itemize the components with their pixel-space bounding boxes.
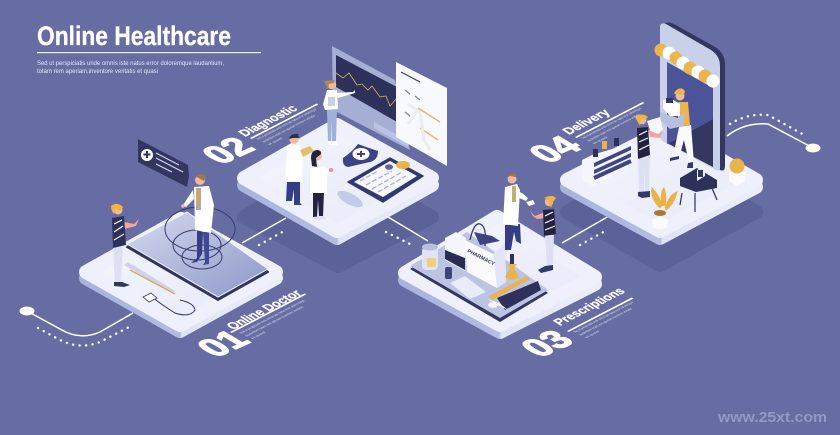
shield icon (343, 144, 378, 167)
body text: Sed ut perspiciatis unde omnis iste natus error doloremque (581, 107, 643, 140)
white chart panel (396, 62, 447, 166)
platform shadows (244, 155, 756, 266)
connector: platform 3 to 4 (562, 216, 609, 245)
platform 2: diagnostic (244, 125, 432, 238)
platform 4: delivery (567, 129, 756, 238)
body text: laudantium totam rem aperiam inventore veritatis (261, 114, 316, 143)
body text: laudantium totam rem aperiam inventore veritatis (578, 307, 633, 336)
body text: et quasi (267, 137, 284, 146)
body text: et quasi (250, 331, 267, 340)
label 04 (519, 102, 652, 168)
gold box (729, 158, 746, 186)
small bottle (445, 267, 452, 279)
number 03: 03 (511, 324, 583, 362)
heading prescriptions: Prescriptions (550, 285, 629, 328)
figure: doctor on platform 1 (181, 174, 214, 265)
shopping bag (465, 224, 506, 288)
figure: doctor on platform 3 (503, 174, 535, 250)
figure: woman doctor at monitor (323, 80, 355, 145)
pharmacy label: PHARMACY (466, 248, 496, 268)
phone on platform (127, 212, 268, 300)
tablet (410, 232, 548, 322)
blister pack (450, 276, 486, 299)
number 02: 02 (192, 131, 264, 169)
intro text: totam rem aperiam,inventore veritatis et quasi (37, 68, 158, 75)
connector: platform 4 to end (727, 115, 820, 152)
body text: et quasi (592, 136, 609, 145)
potted plant (652, 188, 677, 230)
speech bubble icon (138, 139, 189, 187)
phone storefront (654, 22, 725, 171)
label 02 (192, 103, 327, 169)
title: Online Healthcare (37, 21, 231, 51)
body text: Sed ut perspiciatis unde omnis iste natus error doloremque (239, 299, 306, 335)
connector: platform 1 to 2 (242, 218, 286, 245)
connector: platform 2 to 3 (386, 217, 428, 246)
holographic rings (165, 207, 235, 269)
figure: woman on platform 3 (530, 196, 556, 273)
number 01: 01 (187, 324, 259, 362)
medicine box (445, 232, 466, 271)
title block (37, 21, 261, 75)
figure: male doctor on platform 2 (285, 134, 314, 205)
clipboard (348, 158, 423, 202)
thermometer (124, 262, 175, 294)
number 04: 04 (519, 130, 591, 168)
intro text: Sed ut perspiciatis unde omnis iste natus error doloremque laudantium, (37, 60, 224, 67)
heading delivery: Delivery (559, 107, 614, 137)
body text: et quasi (584, 330, 601, 339)
platform 3: prescriptions (405, 217, 595, 332)
monitor (332, 46, 410, 150)
platform 1: online doctor (86, 212, 276, 331)
awning (654, 44, 720, 88)
stethoscope (143, 293, 195, 315)
figure: woman doctor on platform 2 (310, 150, 333, 220)
keyboard pad (335, 188, 365, 210)
medicine pack (487, 276, 541, 310)
dark table (680, 165, 717, 212)
label 01 (187, 287, 315, 362)
body text: Sed ut perspiciatis unde omnis iste natus error doloremque (256, 108, 318, 141)
connector: start to platform 1 (20, 306, 133, 346)
figure: woman customer (635, 114, 663, 198)
heading diagnostic: Diagnostic (235, 103, 301, 139)
label 03 (511, 285, 644, 362)
body text: Sed ut perspiciatis unde omnis iste natus error doloremque (573, 301, 635, 334)
counter (582, 138, 632, 186)
medicine jar (422, 244, 438, 270)
body text: laudantium totam rem aperiam inventore veritatis (586, 113, 641, 142)
figure: woman on platform 1 (111, 204, 139, 287)
watermark: www.25xt.com (717, 410, 827, 426)
body text: laudantium totam rem aperiam inventore veritatis (244, 306, 305, 337)
flask (505, 254, 519, 280)
heading online doctor: Online Doctor (223, 287, 305, 332)
figure: delivery man (660, 88, 694, 168)
